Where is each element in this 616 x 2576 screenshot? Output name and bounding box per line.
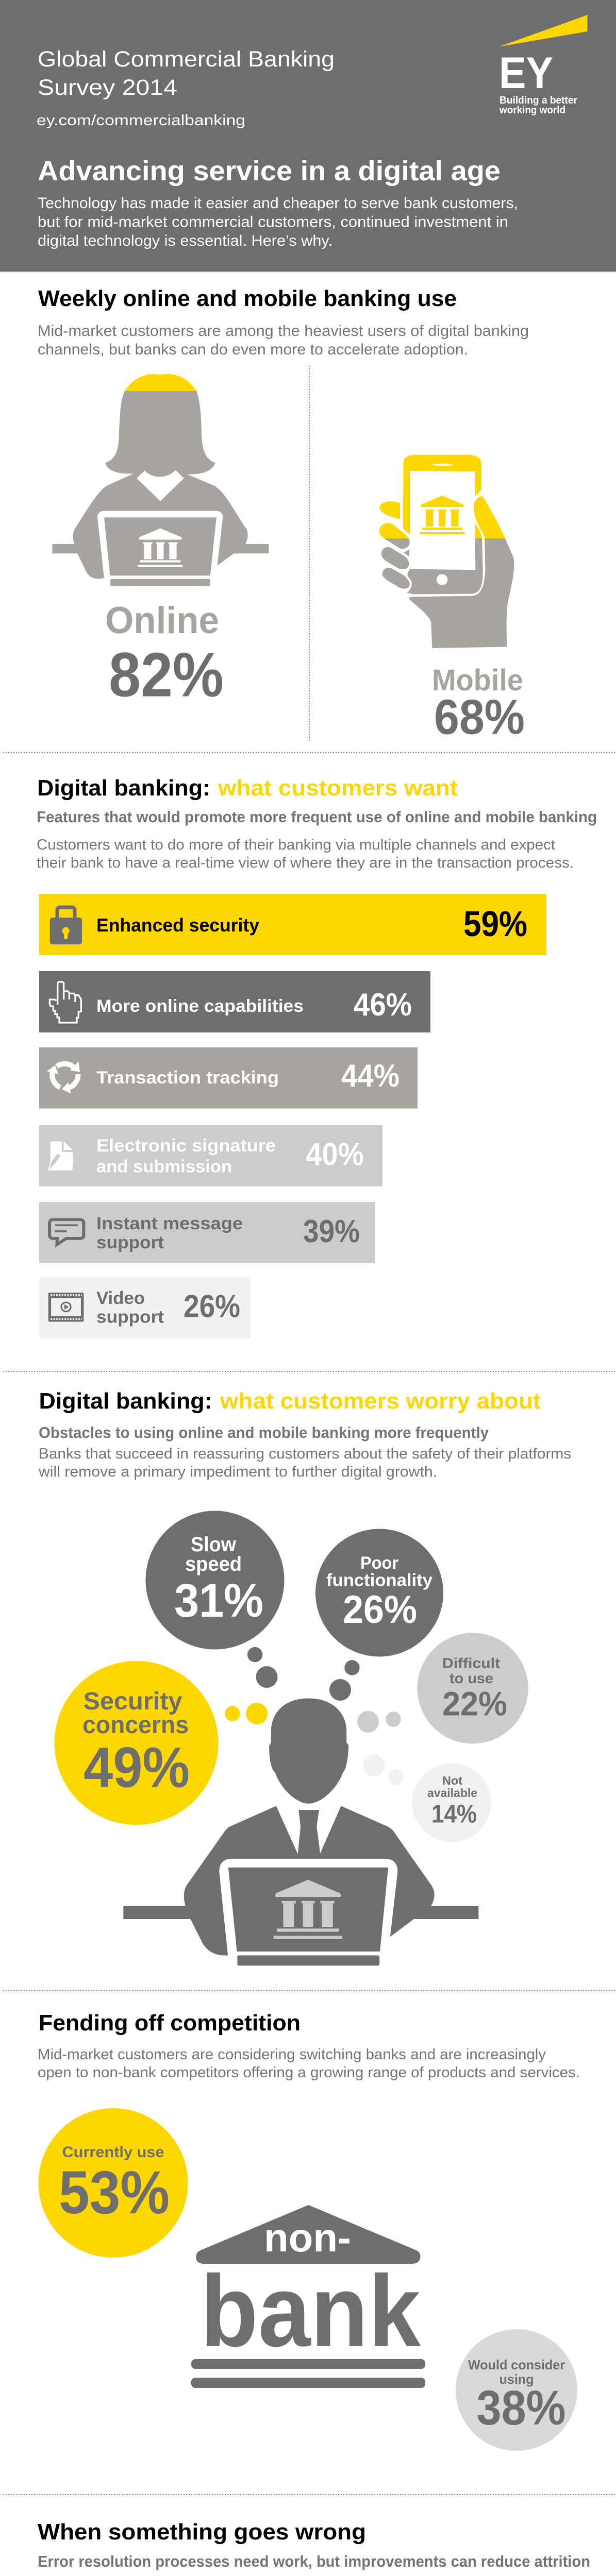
heading: fending off competition: Fending off competition — [39, 2010, 301, 2036]
mobile stat: 68% — [434, 689, 525, 745]
section intro text: channels, but banks can do even more to accelerate adoption. — [38, 341, 468, 358]
bar: instant message — [39, 1202, 375, 1263]
bar: transaction tracking — [39, 1047, 418, 1109]
intro text: Technology has made it easier and cheaper to serve bank customers, — [38, 195, 518, 212]
bubble: currently use — [38, 2108, 188, 2258]
bubble: security concerns — [55, 1661, 219, 1825]
bar: video support: support — [96, 1308, 164, 1327]
bubble: currently use: 53% — [59, 2159, 170, 2227]
bubble: poor functionality: functionality — [326, 1570, 432, 1590]
bar: video support: 26% — [184, 1289, 240, 1324]
bar: electronic signature — [39, 1125, 382, 1187]
bar: more online capabilities: 46% — [354, 987, 412, 1023]
want intro text: Customers want to do more of their banking via multiple channels and expect — [37, 837, 555, 853]
icon: film frame — [48, 1293, 84, 1321]
bar: enhanced security: 59% — [463, 904, 527, 944]
online stat — [105, 600, 224, 710]
icon: document with pen — [48, 1141, 73, 1171]
worry intro text — [38, 1446, 571, 1480]
section intro text — [38, 323, 529, 358]
section intro text: Mid-market customers are among the heaviest users of digital banking — [38, 323, 529, 340]
thought bubbles — [225, 1647, 404, 1785]
icon: pointer hand — [49, 982, 81, 1023]
bubble: poor functionality: Poor — [360, 1553, 398, 1573]
bubble: not available: Not — [442, 1774, 462, 1787]
bubble: slow speed — [145, 1511, 285, 1650]
panel: what customers worry about — [38, 1388, 571, 1965]
subheading: error resolution: Error resolution processes need work, but improvements can reduce attrition — [38, 2552, 590, 2570]
bubble: not available: 14% — [431, 1799, 477, 1828]
competition intro text: open to non-bank competitors offering a growing range of products and services. — [38, 2064, 580, 2081]
heading: advancing service: Advancing service in a digital age — [38, 156, 501, 187]
logo: EY — [499, 15, 588, 116]
subheading: obstacles: Obstacles to using online and mobile banking more frequently — [39, 1423, 489, 1442]
bubble: poor functionality: 26% — [343, 1588, 417, 1632]
mobile stat: Mobile — [432, 664, 523, 697]
title — [38, 47, 335, 100]
online stat: Online — [105, 600, 219, 641]
heading: weekly use: Weekly online and mobile banking use — [38, 286, 457, 311]
subheading: features: Features that would promote more frequent use of online and mobile banking — [37, 808, 597, 826]
icon: woman at laptop — [52, 374, 269, 586]
bar: transaction tracking: Transaction tracking — [96, 1068, 279, 1088]
bubble: security concerns: concerns — [82, 1711, 189, 1739]
bar: transaction tracking: 44% — [341, 1058, 399, 1094]
heading: what customers worry about: Digital banking: — [39, 1388, 212, 1414]
bubble: slow speed: speed — [185, 1553, 242, 1575]
bar: instant message: Instant message — [96, 1214, 243, 1233]
bubble: would consider using: Would consider — [468, 2357, 565, 2372]
bubble: difficult to use: to use — [449, 1670, 493, 1686]
bubble: would consider using: using — [499, 2371, 534, 2387]
bubble: poor functionality — [315, 1529, 443, 1657]
panel: weekly online and mobile banking use — [38, 286, 529, 745]
icon: circular arrows — [47, 1062, 80, 1094]
bubble: difficult to use — [418, 1633, 528, 1743]
want intro text: their bank to have a real-time view of where they are in the transaction process. — [37, 855, 574, 871]
icon: non-bank building — [191, 2205, 425, 2388]
intro text: but for mid-market commercial customers, continued investment in — [38, 213, 508, 231]
want intro text — [37, 837, 574, 871]
panel: header — [0, 0, 616, 272]
bar: enhanced security: Enhanced security — [96, 914, 259, 936]
competition intro text — [38, 2046, 580, 2081]
intro text: digital technology is essential. Here’s why. — [38, 232, 332, 249]
bar: video support: Video — [96, 1289, 145, 1308]
bubble: would consider using: 38% — [476, 2381, 566, 2435]
report url: ey.com/commercialbanking — [37, 112, 245, 129]
icon: speech bubble — [49, 1219, 84, 1245]
title: Survey 2014 — [38, 75, 177, 100]
bar: more online capabilities: More online capabilities — [96, 996, 304, 1016]
bubble: difficult to use: 22% — [442, 1685, 507, 1723]
panel: what customers want — [37, 775, 597, 1338]
heading: what customers worry about: what customers worry about — [220, 1388, 541, 1414]
bubble: not available — [412, 1763, 491, 1842]
logo: EY: Building a better — [500, 95, 577, 106]
competition intro text: Mid-market customers are considering switching banks and are increasingly — [38, 2046, 546, 2063]
online stat: 82% — [109, 640, 224, 710]
icon: non-bank building: bank — [201, 2255, 421, 2368]
icon: non-bank building: non- — [264, 2215, 351, 2260]
bubble: currently use: Currently use — [62, 2144, 164, 2161]
bubble: difficult to use: Difficult — [442, 1655, 500, 1671]
panel: fending off competition — [38, 2010, 580, 2451]
bar: more online capabilities — [39, 971, 430, 1032]
bubble: security concerns: 49% — [84, 1736, 190, 1800]
bar: electronic signature: 40% — [306, 1137, 364, 1173]
worry intro text: Banks that succeed in reassuring customers about the safety of their platforms — [39, 1446, 571, 1462]
icon: hand holding phone — [379, 455, 514, 648]
heading: when something goes wrong: When something goes wrong — [38, 2519, 366, 2545]
intro text — [38, 195, 518, 249]
heading: what customers want: what customers want — [218, 775, 458, 801]
heading: what customers want: Digital banking: — [37, 775, 210, 801]
bubble: slow speed: Slow — [191, 1533, 237, 1556]
bubble: would consider using — [456, 2329, 577, 2451]
bubble: slow speed: 31% — [174, 1574, 263, 1627]
worry intro text: will remove a primary impediment to further digital growth. — [38, 1464, 437, 1480]
bubble: security concerns: Security — [84, 1688, 182, 1715]
bubble: not available: available — [427, 1786, 477, 1800]
mobile stat — [432, 664, 525, 745]
bar: instant message: support — [96, 1233, 164, 1252]
logo: EY: EY — [499, 48, 553, 98]
title: Global Commercial Banking — [38, 47, 335, 72]
logo: EY: working world — [499, 105, 565, 116]
bar: electronic signature: and submission — [96, 1157, 232, 1177]
bar: instant message: 39% — [303, 1214, 360, 1249]
icon: padlock — [50, 907, 82, 944]
bar: video support — [39, 1278, 251, 1338]
icon: businessman at laptop — [123, 1699, 478, 1965]
panel: when something goes wrong — [37, 2519, 590, 2576]
bar: enhanced security — [39, 894, 546, 955]
bar: electronic signature: Electronic signature — [96, 1136, 276, 1156]
